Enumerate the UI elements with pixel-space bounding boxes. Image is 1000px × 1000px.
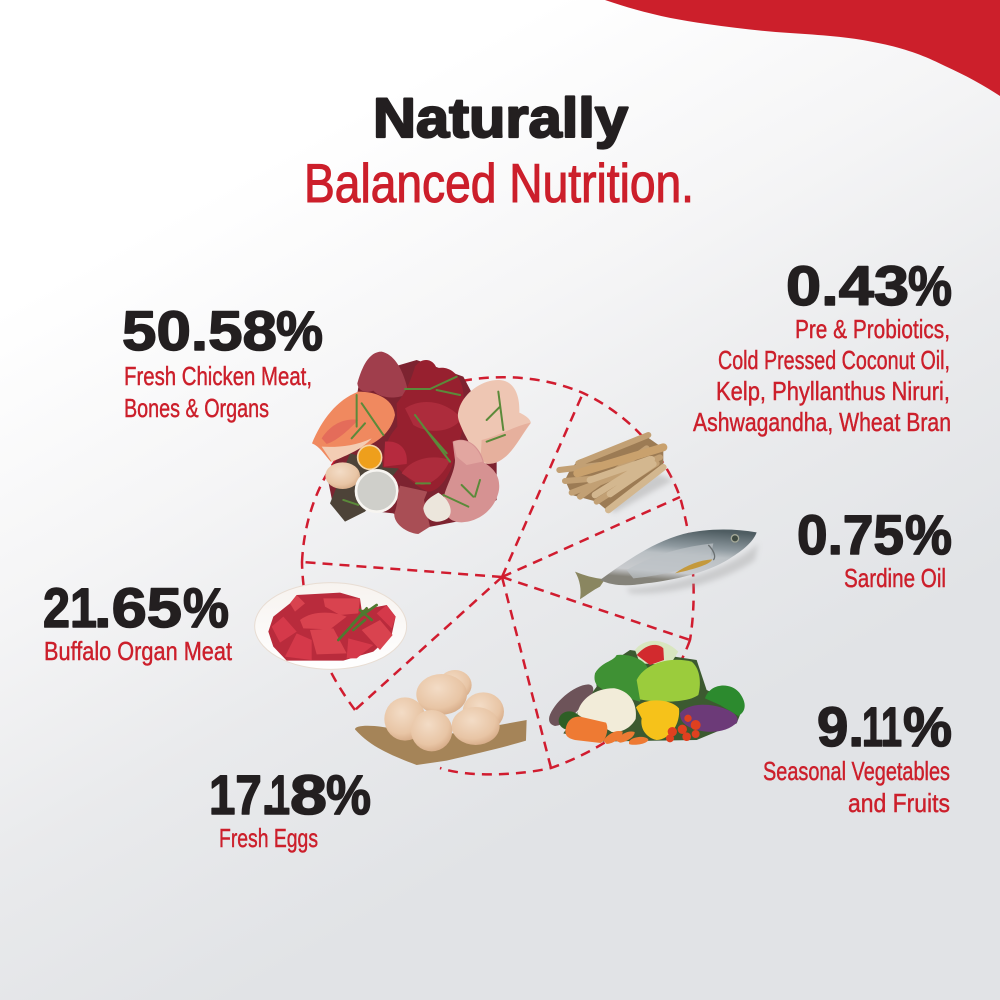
cucumber xyxy=(559,711,580,730)
salt bowl xyxy=(356,470,397,512)
fish eye xyxy=(731,535,739,542)
cauliflower xyxy=(577,688,636,732)
value: 1 xyxy=(270,763,290,826)
red corner wave xyxy=(605,0,1000,96)
bundle base xyxy=(565,437,663,510)
fish body xyxy=(600,529,757,585)
green pepper xyxy=(705,686,745,716)
meat base shadow xyxy=(327,360,497,530)
right egg xyxy=(463,692,504,731)
stat: 50.58% fresh chicken xyxy=(122,299,323,423)
stat: 9.11% vegetables xyxy=(763,695,952,818)
cherry tomatoes xyxy=(666,715,701,742)
carrot slices xyxy=(603,731,648,745)
food image: eggs on burlap xyxy=(355,670,527,765)
value: % xyxy=(276,299,323,362)
value: 21 xyxy=(43,576,97,639)
stat: 0.75% sardine oil xyxy=(797,503,952,593)
fish shadow xyxy=(627,543,758,594)
label: Fresh Chicken Meat, xyxy=(124,361,312,391)
front egg xyxy=(411,710,452,751)
potato xyxy=(549,684,593,726)
salmon steak xyxy=(312,392,395,462)
title line: Balanced Nutrition: Balanced Nutrition. xyxy=(304,152,694,214)
value: % xyxy=(908,254,952,317)
value: .65 xyxy=(94,576,182,639)
lettuce xyxy=(637,660,700,702)
value: % xyxy=(183,576,229,639)
turmeric bowl xyxy=(358,445,382,469)
cabbage top xyxy=(635,641,678,665)
egg xyxy=(325,462,360,489)
label line 1: Pre & Probiotics, xyxy=(795,314,950,344)
value: % xyxy=(905,503,952,566)
fish lateral highlight xyxy=(627,543,713,578)
title line: Naturally: Naturally xyxy=(373,86,628,149)
label second line: Bones & Organs xyxy=(124,393,269,423)
pie chart outline xyxy=(302,377,694,774)
label line 1: Seasonal Vegetables xyxy=(763,756,950,786)
yellow pepper xyxy=(636,700,679,740)
value: % xyxy=(903,695,952,758)
value: 8 xyxy=(290,763,327,826)
garlic xyxy=(423,493,451,522)
value: 11 xyxy=(862,695,902,758)
fish gill xyxy=(708,545,715,560)
slice divider lines xyxy=(302,393,690,768)
front right egg xyxy=(452,707,500,745)
value: % xyxy=(326,763,371,826)
food image: vegetables xyxy=(549,641,745,745)
spinach leaves xyxy=(594,655,648,702)
minced meat xyxy=(394,486,430,534)
purple cabbage xyxy=(680,705,738,732)
label line 2: and Fruits xyxy=(848,788,950,818)
carrot xyxy=(565,717,607,743)
heart meat xyxy=(357,352,408,397)
plate xyxy=(255,583,407,669)
value: 17. xyxy=(209,763,275,826)
eggs xyxy=(384,670,504,751)
food image: meats xyxy=(312,352,531,534)
shadow under sticks xyxy=(607,473,673,513)
label: Sardine Oil xyxy=(844,563,946,593)
value: 0.75 xyxy=(797,503,904,566)
label: Fresh Eggs xyxy=(219,823,318,853)
rosemary sprigs xyxy=(343,377,505,507)
herb sprig xyxy=(338,605,377,640)
food image: fish xyxy=(575,529,758,599)
label: Buffalo Organ Meat xyxy=(44,636,233,666)
value: 0.43 xyxy=(786,254,909,317)
fish fin xyxy=(675,559,712,573)
burlap cloth xyxy=(355,720,527,765)
back egg xyxy=(438,670,472,700)
vegetables dark backing xyxy=(563,650,743,742)
value: 9. xyxy=(817,695,864,758)
food image: plate of buffalo meat xyxy=(255,583,407,669)
value: 50.58 xyxy=(122,299,277,362)
chicken xyxy=(458,380,531,464)
stat: 21.65% buffalo xyxy=(43,576,233,666)
label line 3: Kelp, Phyllanthus Niruri, xyxy=(716,376,950,406)
pork xyxy=(443,440,499,522)
red pepper xyxy=(637,645,664,665)
beef xyxy=(383,360,465,492)
fish tail xyxy=(575,572,605,599)
stat: 0.43% supplements xyxy=(693,254,952,437)
cutting board xyxy=(330,453,400,522)
top egg xyxy=(416,674,467,715)
food image: ashwagandha sticks xyxy=(559,435,673,513)
left egg xyxy=(384,697,426,741)
meat cubes xyxy=(290,595,393,654)
stick bundle xyxy=(559,435,660,502)
stat: 17.18% eggs xyxy=(209,763,371,853)
title xyxy=(304,86,694,214)
meat base xyxy=(268,593,396,661)
outer arc xyxy=(302,377,694,774)
